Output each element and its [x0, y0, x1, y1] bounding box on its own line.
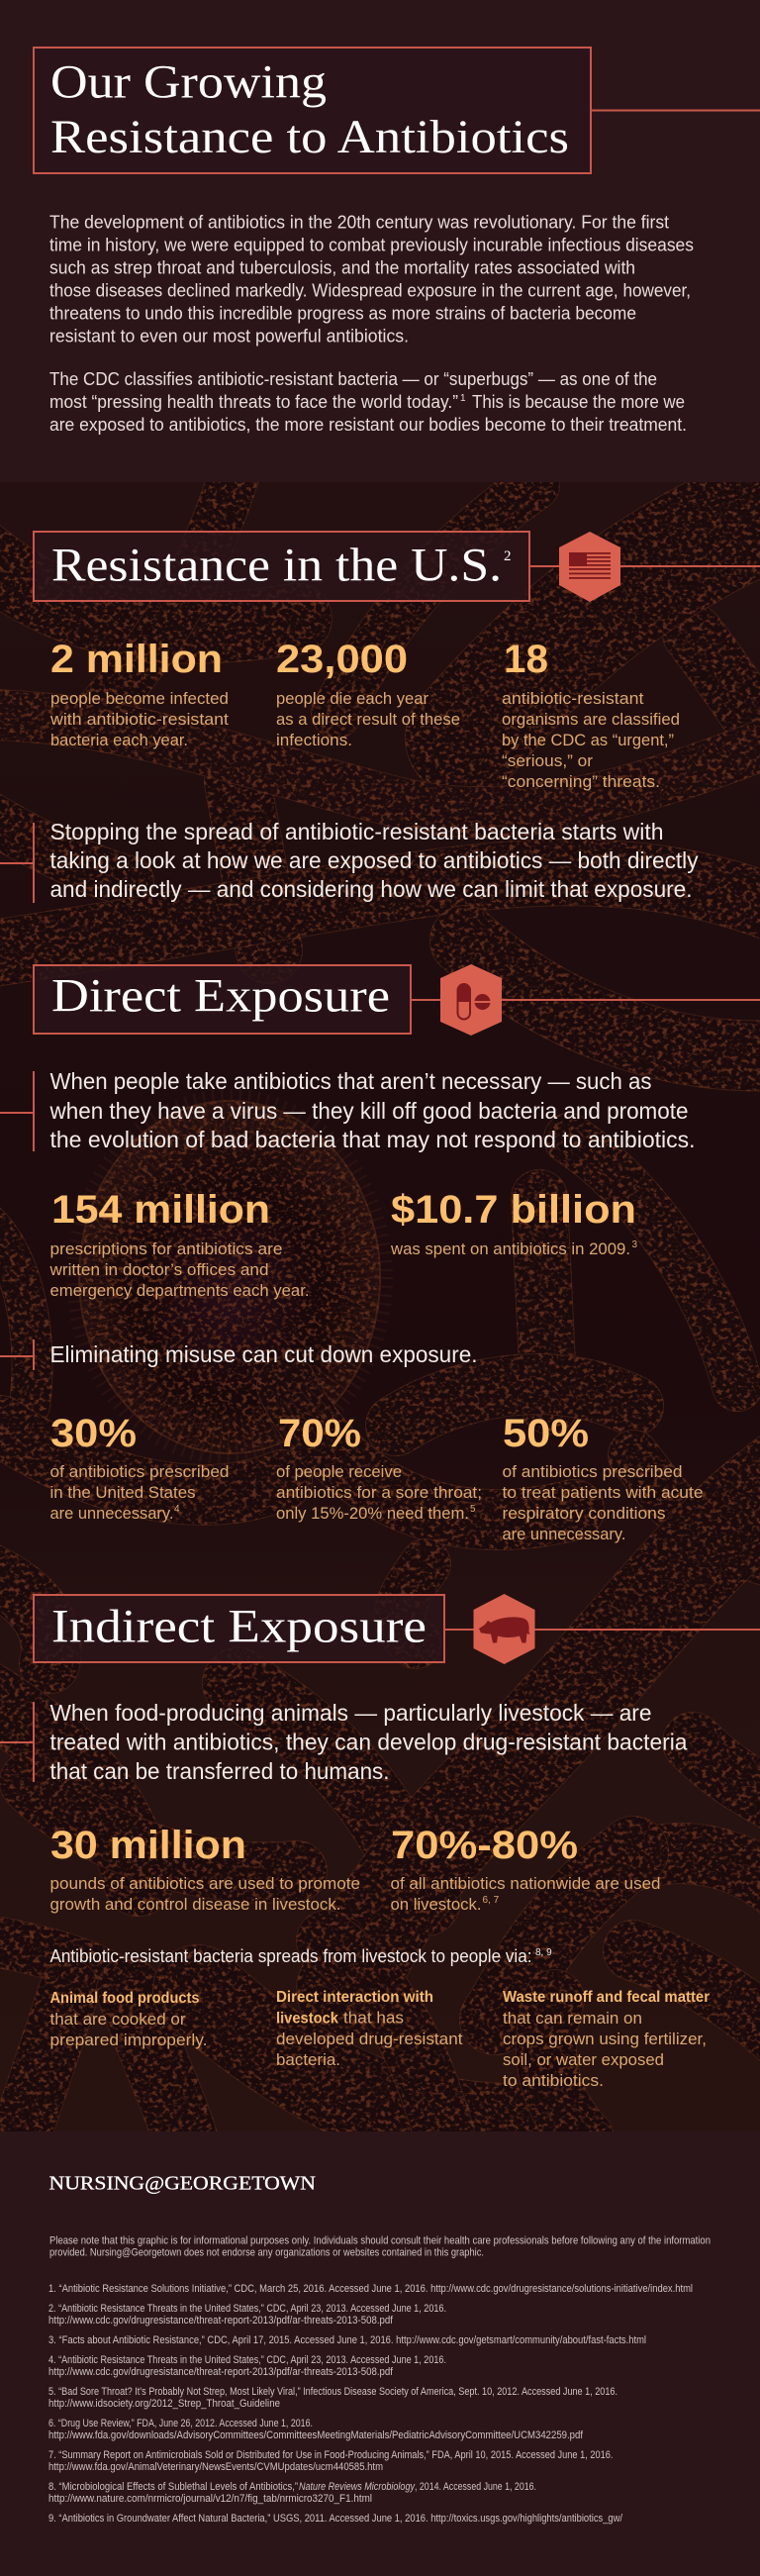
stat: 70%: antibiotics for a sore throat;: [276, 1484, 482, 1502]
intro paragraph two: most “pressing health threats to face the world today.”: [49, 391, 458, 412]
route: waste runoff and fecal matter: crops grown using fertilizer,: [503, 2031, 707, 2048]
icon: pills hexagon: [440, 964, 502, 1036]
stat: 70%-80%: 70%-80%: [391, 1824, 578, 1867]
references list: 2. “Antibiotic Resistance Threats in the United States,” CDC, April 23, 2013. Accessed June 1, 2016.: [48, 2303, 446, 2315]
stat: $10.7 billion: $10.7 billion: [391, 1188, 636, 1232]
stat: 23,000: 23,000: [276, 638, 408, 681]
references list: 9. “Antibiotics in Groundwater Affect Natural Bacteria,” USGS, 2011. Accessed June 1, 2016. http://toxics.usgs.gov/highlights/antibiotics_gw/: [48, 2513, 623, 2525]
stat: 30 million: growth and control disease in livestock.: [49, 1896, 340, 1914]
stat: 30%: 4: [174, 1504, 180, 1515]
references list: 5. “Bad Sore Throat? It’s Probably Not Strep, Most Likely Viral,” Infectious Disease Society of America, Sept. 10, 2012. Accessed June 1, 2016.: [48, 2386, 618, 2398]
main title with frame: Resistance to Antibiotics: [50, 111, 569, 163]
stat: 30 million: [49, 1824, 360, 1914]
stat: 70%-80%: of all antibiotics nationwide are used: [390, 1875, 661, 1893]
references list: 6. “Drug Use Review,” FDA, June 26, 2012. Accessed June 1, 2016.: [48, 2418, 313, 2429]
intro paragraph one: such as strep throat and tuberculosis, and the mortality rates associated with: [49, 257, 635, 277]
stat: 18: 18: [504, 638, 548, 681]
route: direct interaction with livestock: [276, 1989, 463, 2069]
stat: 18: [502, 638, 680, 791]
stat: 70%-80%: 6, 7: [483, 1895, 500, 1906]
stat: 18: organisms are classified: [502, 711, 680, 729]
section heading: Resistance in the U.S.: 2: [504, 548, 511, 564]
stat: 154 million: emergency departments each year.: [49, 1282, 309, 1300]
route: direct interaction with livestock: bacteria.: [276, 2051, 340, 2069]
callout: stopping the spread: [0, 819, 699, 903]
stat: 23,000: infections.: [276, 732, 352, 749]
route: waste runoff and fecal matter: [503, 1989, 710, 2090]
callout: food-producing animals: [0, 1700, 688, 1784]
icon: American flag hexagon: [559, 532, 620, 602]
callout: food-producing animals: treated with antibiotics, they can develop drug-resistant bacteria: [49, 1729, 688, 1754]
callout: food-producing animals: that can be transferred to humans.: [49, 1758, 390, 1784]
stat: 30%: in the United States: [49, 1484, 196, 1502]
intro paragraph one: time in history, we were equipped to combat previously incurable infectious diseases: [49, 234, 694, 255]
stat: 50%: 50%: [503, 1412, 589, 1455]
stat: 18: “serious,” or: [502, 752, 594, 770]
route: waste runoff and fecal matter: that can remain on: [503, 2010, 642, 2028]
section heading: Indirect Exposure: Indirect Exposure: [51, 1600, 427, 1653]
stat: 70%-80%: on livestock.: [390, 1896, 481, 1914]
callout: unnecessary antibiotics: when they have a virus — they kill off good bacteria and promote: [49, 1098, 689, 1124]
section heading: Resistance in the U.S.: Resistance in the U.S.: [51, 539, 502, 592]
references list: 3. “Facts about Antibiotic Resistance,” CDC, April 17, 2015. Accessed June 1, 2016. http://www.cdc.gov/getsmart/community/about/fast-facts.html: [48, 2334, 646, 2346]
stat: 2 million: 2 million: [50, 638, 223, 681]
references list: http://www.fda.gov/downloads/AdvisoryCommittees/CommitteesMeetingMaterials/PediatricAdvisoryCommittee/UCM342259.pdf: [48, 2429, 584, 2441]
intro paragraph one: [49, 212, 694, 347]
main title with frame: [34, 48, 760, 173]
stat: 50%: of antibiotics prescribed: [503, 1463, 683, 1481]
stat: 154 million: written in doctor’s offices and: [48, 1261, 268, 1279]
stat: 2 million: bacteria each year.: [50, 732, 188, 749]
route: waste runoff and fecal matter: to antibiotics.: [503, 2072, 604, 2090]
route: animal food products: [49, 1990, 208, 2049]
references list: http://www.cdc.gov/drugresistance/threat-report-2013/pdf/ar-threats-2013-508.pdf: [48, 2366, 394, 2378]
stat: 2 million: people become infected: [50, 690, 229, 708]
section heading: Resistance in the U.S.: [34, 532, 760, 602]
route: direct interaction with livestock: livestock: [276, 2010, 338, 2028]
stat: 2 million: with antibiotic-resistant: [49, 711, 229, 729]
stat: 50%: are unnecessary.: [503, 1526, 625, 1543]
stat: 30%: are unnecessary.: [49, 1505, 174, 1523]
route: direct interaction with livestock: developed drug-resistant: [276, 2031, 463, 2048]
route: direct interaction with livestock: Direct interaction with: [276, 1989, 433, 2006]
logo: Nursing@Georgetown: NURSING@GEORGETOWN: [49, 2172, 316, 2194]
section heading: Direct Exposure: Direct Exposure: [51, 970, 390, 1022]
section heading: Indirect Exposure: [34, 1594, 760, 1664]
route: waste runoff and fecal matter: soil, or water exposed: [503, 2051, 664, 2069]
stat: 18: by the CDC as “urgent,”: [502, 732, 674, 749]
references list: 7. “Summary Report on Antimicrobials Sold or Distributed for Use in Food-Producing Animals,” FDA, April 10, 2015. Accessed June 1, 2016.: [48, 2449, 614, 2461]
intro paragraph two: are exposed to antibiotics, the more resistant our bodies become to their treatment.: [49, 414, 687, 435]
stat: $10.7 billion: [390, 1188, 637, 1258]
callout: unnecessary antibiotics: the evolution of bad bacteria that may not respond to antibiotics.: [49, 1127, 695, 1152]
stat: 70%: [276, 1412, 482, 1523]
stat: 18: antibiotic-resistant: [502, 690, 644, 708]
callout: stopping the spread: and indirectly — and considering how we can limit that exposure.: [49, 876, 693, 902]
text: spread routes intro: Antibiotic-resistant bacteria spreads from livestock to people via:: [49, 1946, 532, 1966]
references list: , 2014. Accessed June 1, 2016.: [415, 2481, 536, 2493]
route: waste runoff and fecal matter: Waste runoff and fecal matter: [503, 1989, 710, 2006]
stat: 30%: [49, 1412, 230, 1523]
stat: 50%: to treat patients with acute: [503, 1484, 703, 1502]
references list: 8. “Microbiological Effects of Sublethal Levels of Antibiotics,”: [48, 2481, 298, 2493]
stat: 23,000: as a direct result of these: [276, 711, 460, 729]
stat: $10.7 billion: was spent on antibiotics in 2009.: [390, 1240, 630, 1258]
references list: http://www.idsociety.org/2012_Strep_Throat_Guideline: [48, 2398, 280, 2410]
stat: 50%: respiratory conditions: [503, 1505, 665, 1523]
text: spread routes intro: 8, 9: [535, 1947, 552, 1958]
route: direct interaction with livestock: that has: [343, 2010, 404, 2028]
callout: unnecessary antibiotics: When people take antibiotics that aren’t necessary — such as: [49, 1068, 651, 1094]
stat: 30%: of antibiotics prescribed: [49, 1463, 230, 1481]
route: animal food products: that are cooked or: [49, 2011, 186, 2029]
stat: 30 million: 30 million: [50, 1824, 246, 1867]
stat: 23,000: [276, 638, 460, 749]
stat: 18: “concerning” threats.: [502, 773, 660, 791]
stat: 70%: only 15%-20% need them.: [276, 1505, 469, 1523]
stat: 50%: [503, 1412, 703, 1543]
stat: 2 million: [49, 638, 229, 749]
references list: http://www.fda.gov/AnimalVeterinary/NewsEvents/CVMUpdates/ucm440585.htm: [48, 2461, 383, 2473]
references list: http://www.nature.com/nrmicro/journal/v12/n7/fig_tab/nrmicro3270_F1.html: [48, 2493, 372, 2505]
callout: stopping the spread: taking a look at how we are exposed to antibiotics — both directly: [49, 847, 699, 873]
callout: eliminating misuse: Eliminating misuse can cut down exposure.: [49, 1341, 477, 1367]
callout: stopping the spread: Stopping the spread of antibiotic-resistant bacteria starts with: [49, 819, 663, 844]
stat: 154 million: 154 million: [51, 1188, 270, 1232]
stat: 70%: 5: [470, 1504, 476, 1515]
stat: 70%-80%: [390, 1824, 661, 1914]
bacteria texture background band: [0, 465, 760, 2148]
references list: http://www.cdc.gov/drugresistance/threat-report-2013/pdf/ar-threats-2013-508.pdf: [48, 2315, 394, 2327]
callout: food-producing animals: When food-producing animals — particularly livestock — are: [49, 1700, 651, 1726]
stat: 30 million: pounds of antibiotics are used to promote: [49, 1875, 360, 1893]
stat: 70%: of people receive: [276, 1463, 402, 1481]
references list: 4. “Antibiotic Resistance Threats in the United States,” CDC, April 23, 2013. Accessed June 1, 2016.: [48, 2354, 446, 2366]
route: animal food products: Animal food products: [49, 1990, 200, 2007]
stat: 70%: 70%: [278, 1412, 361, 1455]
references list: [48, 2283, 693, 2525]
references list: Nature Reviews Microbiology: [299, 2481, 416, 2493]
stat: 30%: 30%: [50, 1412, 137, 1455]
stat: 154 million: prescriptions for antibiotics are: [49, 1240, 283, 1258]
disclaimer: [49, 2235, 711, 2259]
intro paragraph two: This is because the more we: [472, 391, 685, 412]
stat: 23,000: people die each year: [276, 690, 429, 708]
icon: pig hexagon: [473, 1594, 534, 1664]
intro paragraph two: [49, 368, 687, 435]
main title with frame: Our Growing: [50, 55, 327, 109]
intro paragraph one: those diseases declined markedly. Widespread exposure in the current age, however,: [49, 279, 691, 301]
intro paragraph one: The development of antibiotics in the 20th century was revolutionary. For the first: [49, 212, 669, 232]
intro paragraph one: resistant to even our most powerful antibiotics.: [49, 325, 409, 347]
intro paragraph two: The CDC classifies antibiotic-resistant bacteria — or “superbugs” — as one of the: [49, 368, 657, 389]
route: animal food products: prepared improperly.: [49, 2031, 208, 2049]
intro paragraph one: threatens to undo this incredible progress as more strains of bacteria become: [49, 303, 636, 323]
callout: unnecessary antibiotics: [0, 1068, 695, 1152]
stat: 154 million: [48, 1188, 309, 1300]
stat: $10.7 billion: 3: [631, 1239, 637, 1250]
section heading: Direct Exposure: [34, 964, 760, 1036]
intro paragraph two: 1: [460, 393, 466, 404]
disclaimer: provided. Nursing@Georgetown does not endorse any organizations or websites contained in this graphic.: [49, 2247, 484, 2259]
